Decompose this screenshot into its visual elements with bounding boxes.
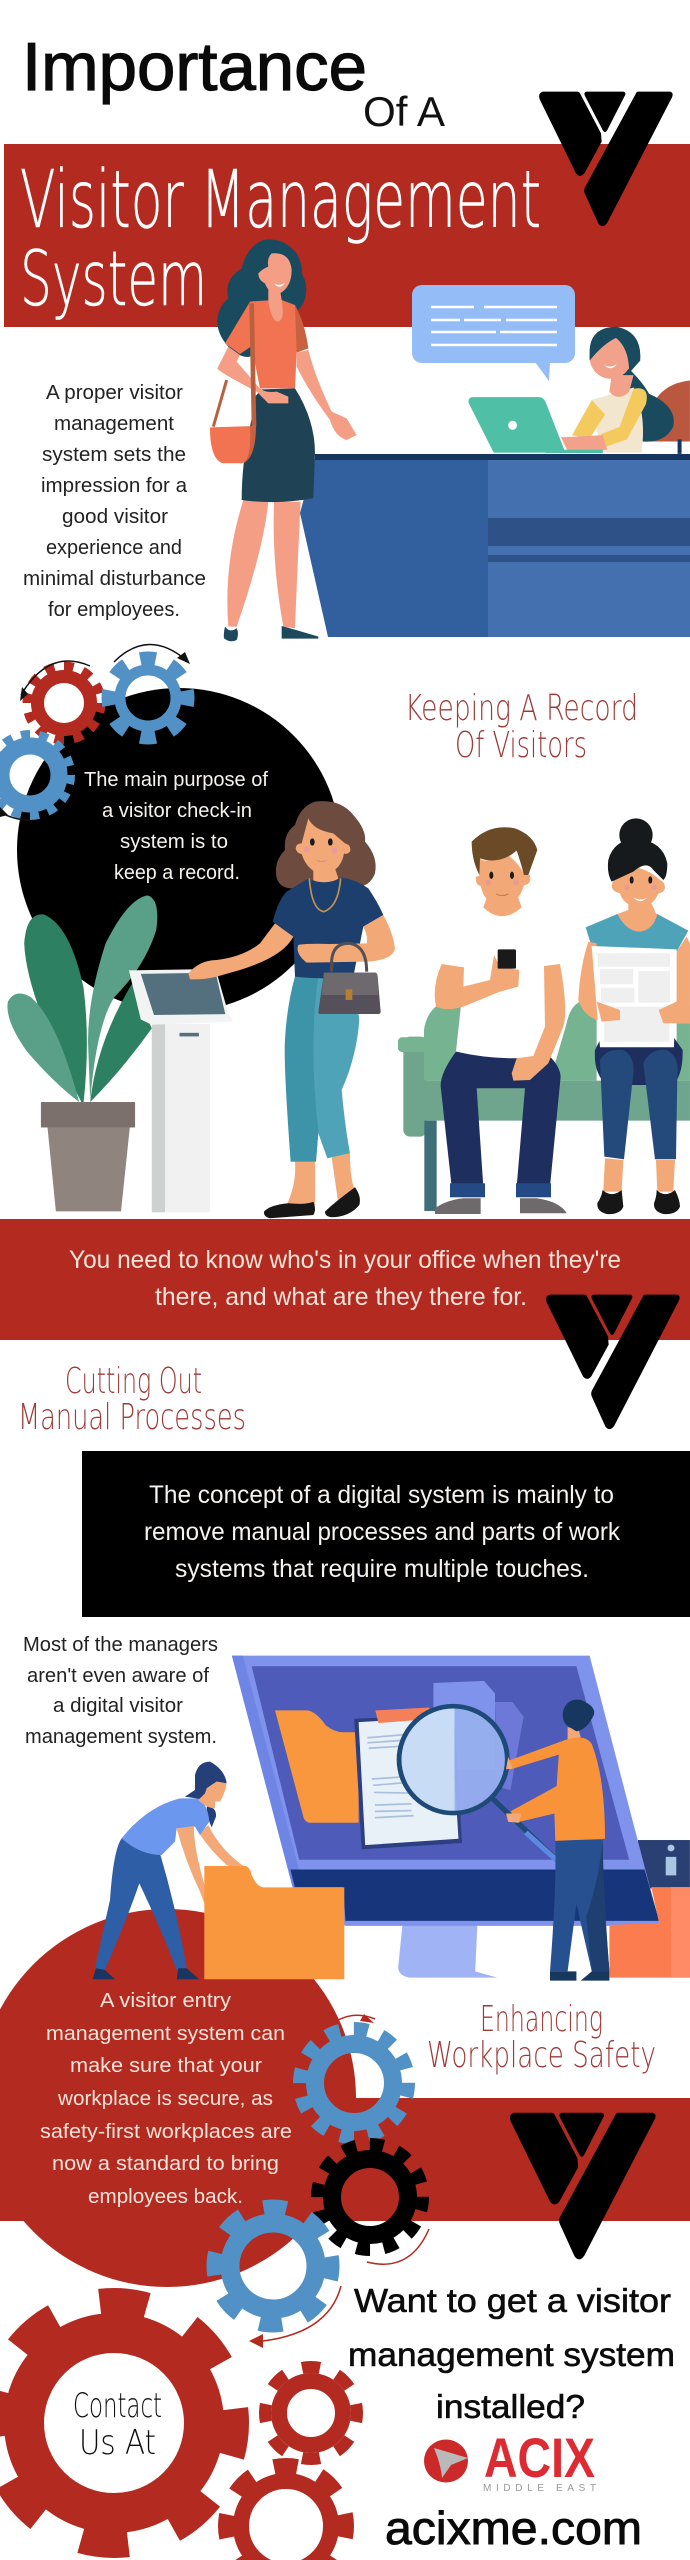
logo: ACIX Middle East: MIDDLE EAST (483, 2483, 596, 2494)
text: intro paragraph (23, 382, 206, 621)
text: managers paragraph: management system. (25, 1726, 217, 1748)
icon: V logo top (539, 92, 673, 226)
text: call to action: Want to get a visitor (354, 2282, 671, 2319)
icon: blue gear upper with arrow (300, 2014, 408, 2137)
icon: black gear with arrow (318, 2145, 429, 2264)
panel: red band with text (0, 1219, 690, 1340)
text: safety paragraph: employees back. (88, 2186, 243, 2208)
icon: blue left gear with arrow (0, 735, 70, 820)
text: managers paragraph: aren't even aware of (27, 1665, 209, 1687)
illustration: reception desk (300, 454, 690, 637)
text: managers paragraph: Most of the managers (23, 1634, 218, 1656)
title: Visitor Management System (20, 154, 541, 323)
text: call to action: installed? (436, 2388, 585, 2425)
text: safety paragraph: make sure that your (70, 2055, 262, 2077)
title: Importance Of A: Importance (22, 29, 367, 105)
text: safety paragraph (40, 1990, 292, 2208)
text: managers paragraph: a digital visitor (53, 1695, 183, 1717)
panel: black box with text: The concept of a digital system is mainly to (149, 1481, 614, 1509)
text: intro paragraph: A proper visitor (46, 382, 183, 404)
icon: big red gear with contact text: Contact (73, 2386, 162, 2426)
panel: lower red band (0, 2098, 690, 2221)
text: intro paragraph: management (54, 413, 174, 435)
text: intro paragraph: system sets the (42, 444, 186, 466)
text: safety paragraph: safety-first workplaces are (40, 2121, 292, 2143)
icon: big red gear with contact text: Us At (79, 2423, 156, 2463)
icon: blue gear lower with arrow (214, 2207, 341, 2348)
panel: black box with text (82, 1451, 690, 1617)
text: call to action (348, 2282, 675, 2425)
icon: speech bubble (412, 285, 575, 381)
text: safety paragraph: A visitor entry (100, 1990, 231, 2012)
icon: lower red gear (226, 2466, 346, 2560)
heading: Keeping A Record Of Visitors: Of Visitors (455, 725, 587, 766)
text: circle paragraph: system is to (120, 831, 228, 853)
panel: red circle (0, 1909, 356, 2287)
panel: black box with text: remove manual processes and parts of work (144, 1518, 620, 1546)
heading: Cutting Out Manual Processes (18, 1361, 246, 1438)
text: intro paragraph: experience and (46, 537, 182, 559)
text: managers paragraph (23, 1634, 218, 1748)
icon: medium red gear (265, 2367, 357, 2459)
text: intro paragraph: for employees. (48, 599, 180, 621)
panel: red band with text: there, and what are they there for. (155, 1283, 527, 1311)
text: circle paragraph: The main purpose of (84, 769, 268, 791)
text: circle paragraph: keep a record. (114, 862, 240, 884)
text: website: acixme.com (385, 2502, 642, 2554)
illustration: woman reading newspaper (578, 818, 690, 1214)
title: Visitor Management System: System (20, 234, 207, 323)
illustration: potted plant (7, 895, 157, 1211)
text: intro paragraph: impression for a (41, 475, 188, 497)
heading: Enhancing Workplace Safety: Enhancing (480, 1999, 603, 2040)
title: Importance Of A (22, 29, 445, 135)
red title band (4, 144, 690, 327)
text: intro paragraph: minimal disturbance (23, 568, 206, 590)
heading: Keeping A Record Of Visitors (405, 688, 638, 766)
illustration: check-in kiosk (129, 969, 233, 1212)
illustration: orange box (609, 1887, 690, 1978)
text: intro paragraph: good visitor (62, 506, 168, 528)
logo: ACIX Middle East (424, 2426, 596, 2494)
heading: Enhancing Workplace Safety (427, 1999, 656, 2076)
illustration: woman at kiosk with handbag (188, 801, 395, 1218)
heading: Cutting Out Manual Processes: Manual Processes (18, 1397, 246, 1438)
title: Importance Of A: Of A (363, 88, 445, 135)
text: circle paragraph: a visitor check-in (102, 800, 252, 822)
icon: red gear with arrow (20, 661, 101, 740)
illustration: man with phone (435, 827, 567, 1214)
illustration: computer monitor with documents (232, 1656, 690, 1978)
text: safety paragraph: management system can (46, 2023, 285, 2045)
logo: ACIX Middle East: ACIX (484, 2426, 595, 2489)
illustration: woman with folder (93, 1762, 344, 1979)
text: safety paragraph: workplace is secure, as (57, 2088, 273, 2110)
icon: big red gear with contact text (0, 2301, 236, 2545)
illustration: man with magnifying glass (506, 1700, 609, 1981)
panel: red band with text: You need to know who's in your office when they're (69, 1246, 621, 1274)
text: call to action: management system (348, 2336, 675, 2373)
panel: black box with text: systems that require multiple touches. (175, 1555, 589, 1583)
illustration: waiting room bench (398, 1002, 690, 1211)
icon: blue top gear with arrow (109, 644, 190, 737)
illustration: visitor woman with bag (210, 239, 357, 641)
illustration: receptionist with laptop (468, 327, 690, 454)
icon: V logo middle (546, 1295, 680, 1429)
text: circle paragraph (84, 769, 268, 884)
panel: black circle (17, 688, 341, 1012)
heading: Cutting Out Manual Processes: Cutting Out (65, 1361, 202, 1402)
icon: V logo lower (510, 2113, 656, 2259)
text: safety paragraph: now a standard to bring (52, 2153, 279, 2175)
